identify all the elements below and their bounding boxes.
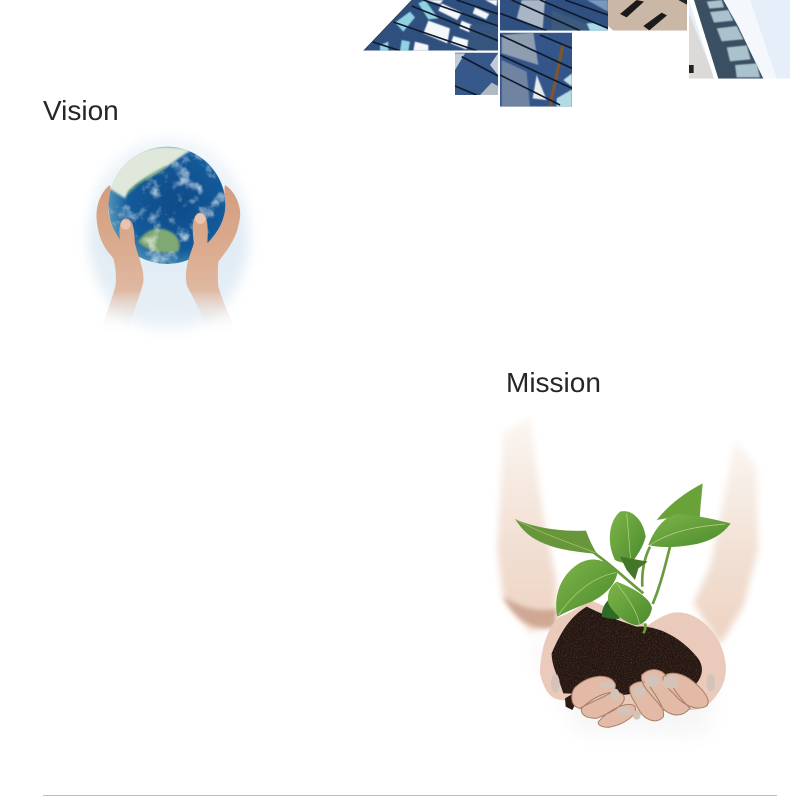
image: hands holding globe — [85, 138, 252, 330]
globe glow — [89, 137, 249, 333]
heading: Vision: Vision — [43, 95, 119, 126]
image: hands holding seedling in soil — [494, 420, 761, 728]
left hand — [96, 185, 143, 332]
right hand — [186, 185, 240, 332]
leaves — [515, 519, 597, 554]
bottom divider line — [43, 795, 777, 796]
seedling — [515, 483, 731, 633]
palms — [540, 600, 726, 713]
stems — [590, 547, 670, 633]
fingers — [551, 670, 715, 727]
globe — [107, 145, 228, 267]
soil — [550, 603, 705, 710]
blurred person — [497, 417, 758, 735]
heading: Mission: Mission — [506, 367, 601, 398]
building photo mosaic — [364, 0, 790, 107]
